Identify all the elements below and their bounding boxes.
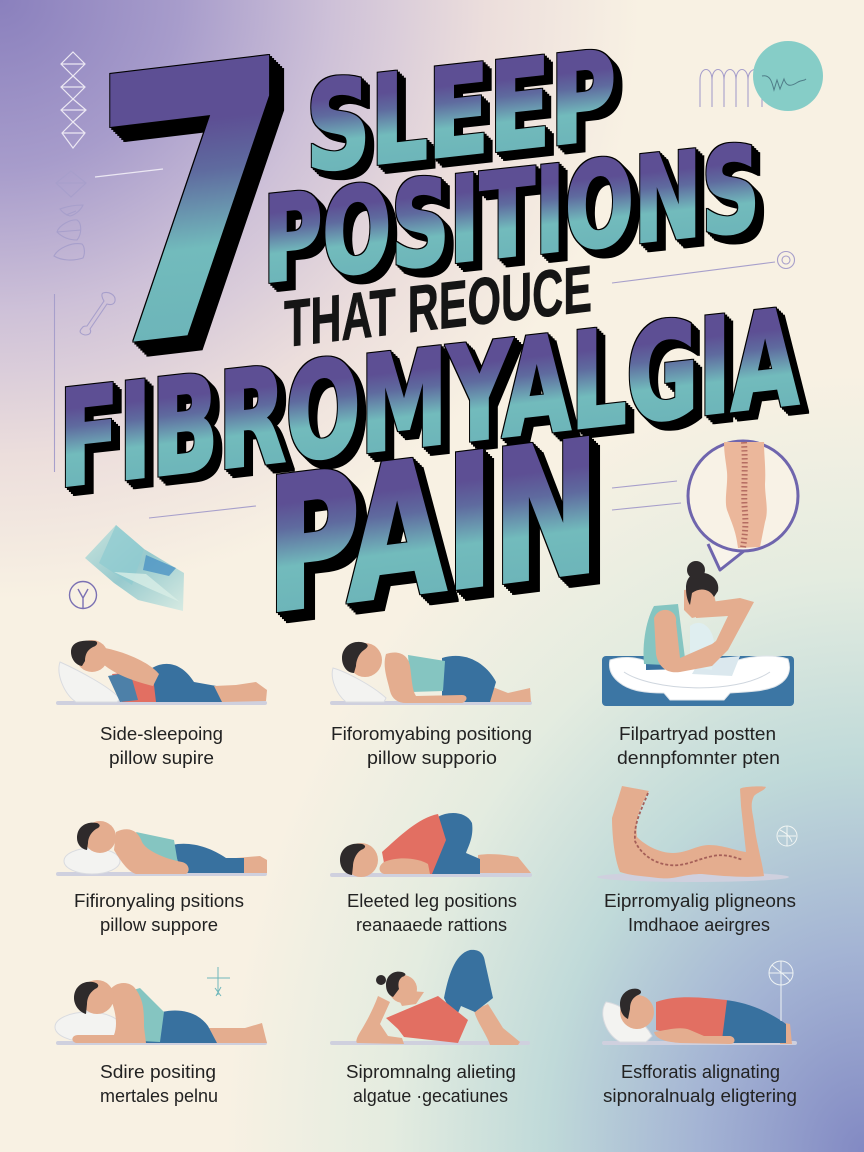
label 2	[331, 724, 532, 768]
label 5: Eleeted leg positions	[347, 891, 517, 911]
icon: diamond stack	[61, 52, 86, 148]
label 9: sipnoralnualg eligtering	[603, 1086, 797, 1106]
figure 1: side sleeping with pillow	[56, 640, 267, 705]
icon: small globe	[777, 826, 797, 846]
label 9	[603, 1062, 797, 1106]
figure 6: spine bend diagram	[597, 786, 789, 882]
icon: small circle sketch	[70, 582, 96, 608]
label 4: Fifironyaling psitions	[74, 891, 244, 911]
figure 8: propped on arm with knee up	[330, 950, 530, 1045]
figure 7: side sleeping arm up	[55, 980, 267, 1045]
label 4: pillow suppore	[100, 915, 218, 935]
label 7: mertales pelnu	[100, 1086, 218, 1106]
label 7	[100, 1062, 218, 1106]
figure 2: fetal side position	[330, 642, 532, 705]
callout: spine circle	[688, 441, 798, 570]
icon: pulse line in teal circle	[700, 41, 823, 111]
figure 3: seated on mattress	[602, 561, 794, 706]
icon: anatomical line sketches	[54, 171, 86, 260]
decorative lines	[54, 262, 775, 518]
label 9: Esfforatis alignating	[621, 1062, 780, 1082]
icon: bone sketch	[80, 292, 115, 335]
label 1: Side-sleepoing	[100, 724, 223, 744]
label 2: pillow supporio	[367, 748, 497, 768]
label 3	[617, 724, 780, 768]
label 6	[604, 891, 796, 935]
icon: crystal shards	[85, 525, 184, 611]
label 5: reanaaede rattions	[356, 915, 507, 935]
label 6: Eiprromyalig pligneons	[604, 891, 796, 911]
figure 9: curled with pillow	[602, 989, 797, 1045]
label 3: Filpartryad postten	[619, 724, 776, 744]
figure 5: curled knees forward	[330, 813, 532, 877]
decorative line light	[95, 169, 163, 177]
label 8: algatue ·gecatiunes	[353, 1086, 508, 1106]
label 6: Imdhaoe aeirgres	[628, 915, 770, 935]
figure 4: side with arm forward	[56, 821, 267, 876]
icon: pin circle	[778, 252, 794, 268]
label 7: Sdire positing	[100, 1062, 216, 1082]
label 8	[346, 1062, 516, 1106]
label 3: dennpfomnter pten	[617, 748, 780, 768]
title: SLEEP: SLEEP	[306, 25, 616, 200]
label 1	[100, 724, 223, 768]
label 1: pillow supire	[109, 748, 214, 768]
icon: globe on stem	[769, 961, 793, 1021]
title: POSITIONS: POSITIONS	[263, 119, 760, 310]
label 2: Fiforomyabing positiong	[331, 724, 532, 744]
label 4	[74, 891, 244, 935]
title: PAIN: PAIN	[267, 400, 599, 654]
label 8: Sipromnalng alieting	[346, 1062, 516, 1082]
icon: cross spark	[207, 967, 230, 996]
label 5	[347, 891, 517, 935]
